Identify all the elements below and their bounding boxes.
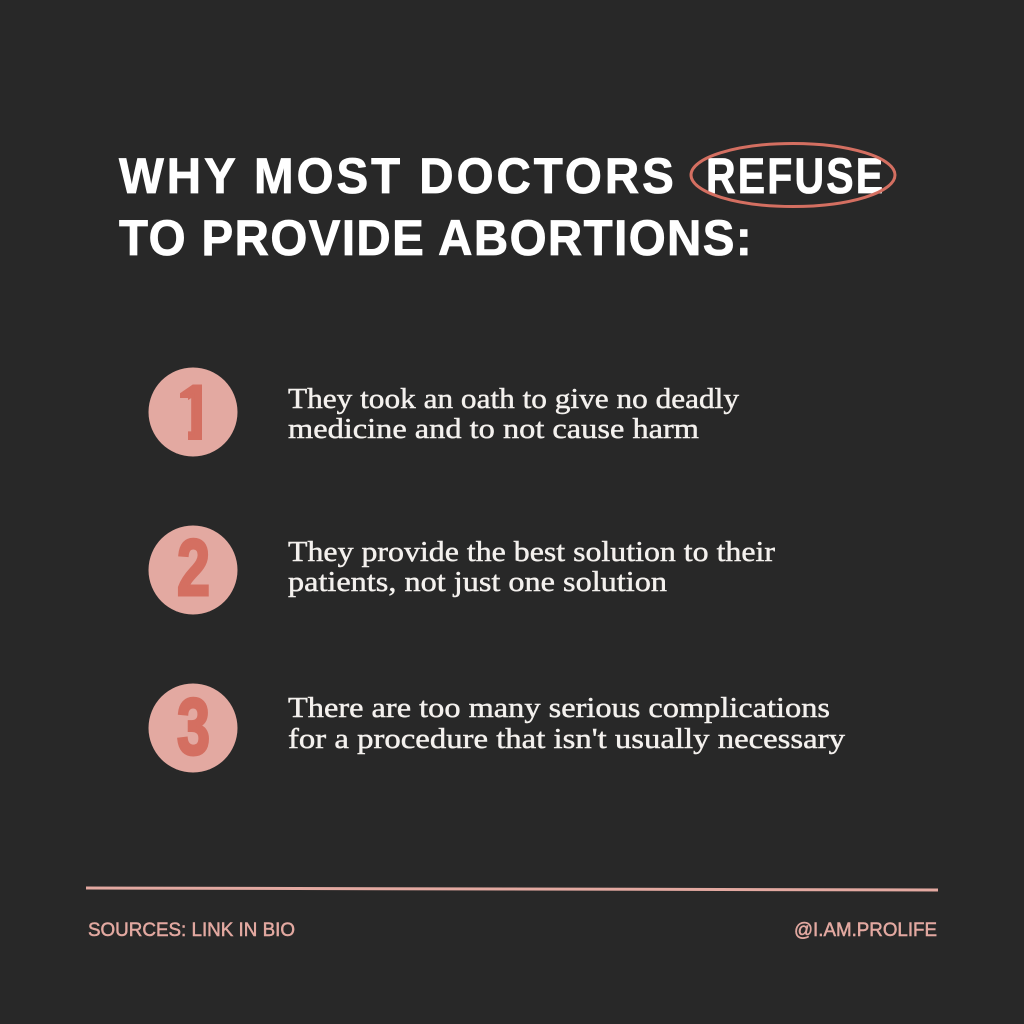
number badge 1: 1 [175, 369, 217, 458]
oval highlight around REFUSE [691, 144, 895, 206]
number badge 2 [148, 523, 238, 614]
number badge 3: 3 [177, 682, 210, 771]
list item 1 [148, 368, 740, 458]
item 1 text [288, 383, 740, 445]
item 1 text: medicine and to not cause harm [288, 413, 699, 445]
item 3 text: for a procedure that isn't usually necessary [288, 723, 846, 755]
item 3 text: There are too many serious complications [288, 692, 830, 724]
title: TO PROVIDE ABORTIONS: [119, 211, 752, 266]
list item 3 [148, 682, 846, 772]
footer divider [86, 886, 938, 892]
title [119, 148, 883, 266]
number badge 3 [148, 682, 238, 772]
item 2 text: They provide the best solution to their [288, 536, 775, 568]
list item 2 [148, 523, 775, 614]
number badge 2: 2 [177, 523, 210, 612]
item 3 text [288, 692, 846, 755]
footer: handle: @I.AM.PROLIFE [794, 920, 937, 941]
item 1 text: They took an oath to give no deadly [288, 383, 740, 415]
number badge 1 [148, 368, 238, 458]
item 2 text: patients, not just one solution [288, 566, 668, 598]
title: REFUSE [706, 148, 883, 204]
title: WHY MOST DOCTORS [119, 149, 674, 204]
footer: sources: SOURCES: LINK IN BIO [88, 920, 295, 941]
item 2 text [288, 536, 775, 598]
